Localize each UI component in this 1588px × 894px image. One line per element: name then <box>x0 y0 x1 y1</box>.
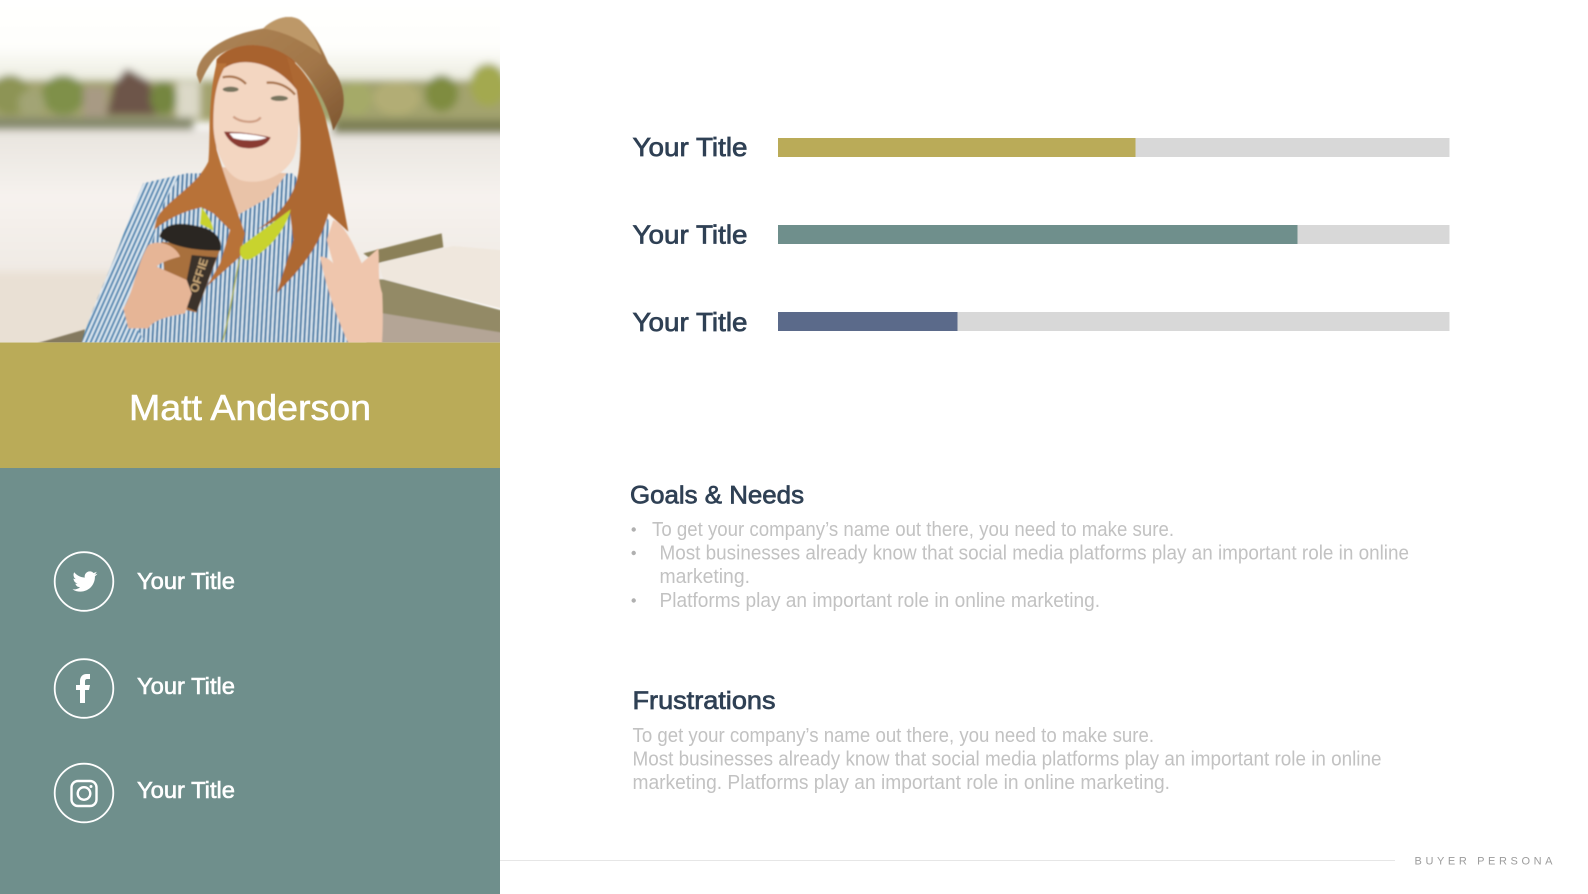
bullet list: marketing. <box>660 566 750 588</box>
nose <box>233 117 261 122</box>
neck <box>222 166 287 215</box>
twitter label: Your Title <box>137 568 235 594</box>
twitter row <box>55 552 235 611</box>
facebook row <box>55 659 235 718</box>
instagram label: Your Title <box>137 777 235 803</box>
cup label: OFFIE <box>187 256 211 294</box>
icon: instagram <box>55 764 113 822</box>
bar row 2: Your Title <box>632 220 748 250</box>
icon: twitter <box>55 552 113 611</box>
heading: Frustrations <box>632 687 776 715</box>
woman <box>82 17 383 343</box>
icon: facebook <box>55 659 113 718</box>
section: goals and needs <box>630 482 1409 612</box>
hair cap behind face <box>213 45 302 100</box>
bar row 3: Your Title <box>632 307 748 337</box>
paragraph: marketing. Platforms play an important role in online marketing. <box>632 772 1170 794</box>
bar chart: skills <box>632 132 1450 337</box>
coffee cup <box>162 242 220 313</box>
name: Matt Anderson <box>129 387 371 428</box>
bar row 3 <box>632 307 1450 337</box>
bar row 1: Your Title <box>632 132 748 162</box>
bullet list: To get your company’s name out there, you need to make sure. <box>652 519 1174 541</box>
instagram row <box>55 764 235 822</box>
bullet list <box>632 519 1409 612</box>
mouth <box>224 132 271 148</box>
hair left lock <box>154 63 245 287</box>
name banner <box>0 342 500 468</box>
photo: woman with hat and coffee <box>0 16 500 342</box>
hat <box>197 17 344 131</box>
section: frustrations <box>632 687 1382 794</box>
hair right lock <box>257 57 348 293</box>
eyes and brows <box>223 77 246 84</box>
footer label: BUYER PERSONA <box>1414 856 1553 868</box>
paragraph: To get your company’s name out there, you need to make sure. <box>632 725 1154 747</box>
heading: Goals & Needs <box>630 482 804 510</box>
panel: social links <box>0 468 500 894</box>
right hand <box>320 220 383 343</box>
paragraph <box>632 725 1382 794</box>
facebook label: Your Title <box>137 673 235 699</box>
bar row 1 <box>632 132 1450 162</box>
paragraph: Most businesses already know that social media platforms play an important role in online <box>632 748 1382 770</box>
bullet list: Platforms play an important role in online marketing. <box>660 590 1100 612</box>
concrete ledge <box>37 233 507 347</box>
headphones <box>240 209 291 260</box>
bullet list: Most businesses already know that social media platforms play an important role in online <box>660 542 1409 564</box>
bar row 2 <box>632 220 1450 250</box>
blurred background scenery <box>0 52 500 342</box>
left hand <box>123 243 192 328</box>
face <box>213 62 299 182</box>
shirt <box>82 173 348 343</box>
